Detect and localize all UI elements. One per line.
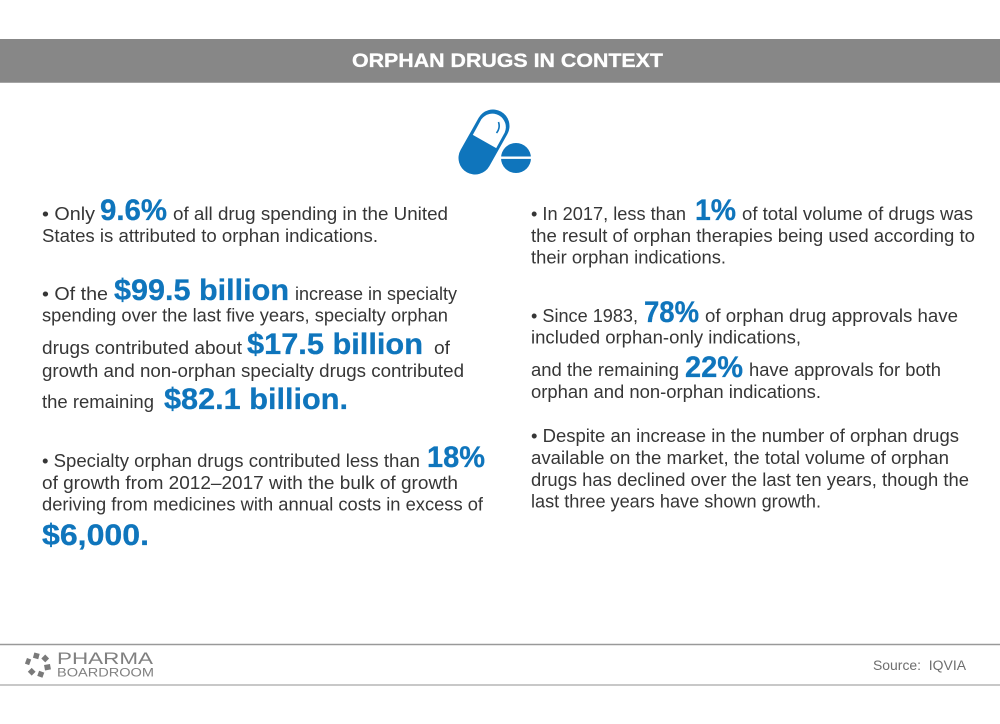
bullet: declining volume: last three years have shown growth.: [531, 492, 821, 512]
bullet: 78% and 22% approvals: 78%: [644, 296, 699, 329]
logo: Pharma Boardroom: [25, 649, 154, 680]
bullet: 9.6% of spending: of all drug spending in the United: [173, 204, 448, 224]
bullet: 78% and 22% approvals: of orphan drug approvals have: [705, 306, 958, 326]
bullet: declining volume: • Despite an increase in the number of orphan drugs: [531, 426, 959, 446]
bullet: 9.6% of spending: States is attributed to orphan indications.: [42, 226, 378, 246]
bullet: 1% of volume: their orphan indications.: [531, 248, 726, 268]
bullet: 18% of growth: [42, 441, 485, 552]
bullet: 1% of volume: 1%: [695, 194, 736, 227]
bullet: specialty spending increase: the remaining: [42, 392, 154, 412]
bullet: 78% and 22% approvals: [531, 296, 958, 402]
bullet: declining volume: [531, 426, 969, 512]
bullet: specialty spending increase: drugs contributed about: [42, 338, 242, 358]
bullet: 18% of growth: of growth from 2012–2017 with the bulk of growth: [42, 473, 458, 493]
bullet: specialty spending increase: spending over the last five years, specialty orphan: [42, 306, 448, 326]
logo: Pharma Boardroom: BOARDROOM: [57, 668, 154, 680]
footer: [0, 644, 1000, 685]
bullet: 78% and 22% approvals: have approvals for both: [749, 360, 941, 380]
icon: pill capsule and tablet: [473, 114, 532, 173]
bullet: 18% of growth: • Specialty orphan drugs contributed less than: [42, 451, 420, 471]
bullet: 78% and 22% approvals: 22%: [685, 351, 743, 384]
bullet: specialty spending increase: growth and non-orphan specialty drugs contributed: [42, 361, 464, 381]
bullet: specialty spending increase: of: [434, 338, 451, 358]
bullet: specialty spending increase: $82.1 billion.: [164, 383, 348, 416]
bullet: 78% and 22% approvals: • Since 1983,: [531, 306, 638, 326]
bullet: 18% of growth: deriving from medicines with annual costs in excess of: [42, 494, 484, 514]
title banner: ORPHAN DRUGS IN CONTEXT: [352, 51, 663, 72]
left column text: [42, 194, 485, 552]
bullet: specialty spending increase: $17.5 billion: [247, 328, 423, 361]
bullet: 1% of volume: [531, 194, 975, 268]
bullet: 9.6% of spending: 9.6%: [100, 194, 167, 227]
bullet: 1% of volume: the result of orphan therapies being used according to: [531, 226, 975, 246]
bullet: specialty spending increase: increase in specialty: [295, 284, 457, 304]
bullet: 18% of growth: 18%: [427, 441, 485, 474]
logo: Pharma Boardroom: PHARMA: [57, 649, 154, 668]
right column text: [531, 194, 975, 512]
bullet: specialty spending increase: [42, 274, 464, 416]
bullet: 1% of volume: of total volume of drugs was: [742, 204, 973, 224]
bullet: 78% and 22% approvals: included orphan-only indications,: [531, 328, 801, 348]
bullet: specialty spending increase: • Of the: [42, 284, 108, 304]
bullet: declining volume: available on the market, the total volume of orphan: [531, 448, 949, 468]
bullet: 78% and 22% approvals: and the remaining: [531, 360, 679, 380]
bullet: 78% and 22% approvals: orphan and non-orphan indications.: [531, 382, 821, 402]
bullet: declining volume: drugs has declined over the last ten years, though the: [531, 470, 969, 490]
bullet: specialty spending increase: $99.5 billion: [114, 274, 289, 307]
source note: Source: IQVIA: [873, 658, 966, 673]
bullet: 9.6% of spending: [42, 194, 448, 246]
bullet: 9.6% of spending: • Only: [42, 204, 95, 224]
title banner: [0, 39, 1000, 83]
bullet: 18% of growth: $6,000.: [42, 519, 149, 552]
bullet: 1% of volume: • In 2017, less than: [531, 204, 686, 224]
